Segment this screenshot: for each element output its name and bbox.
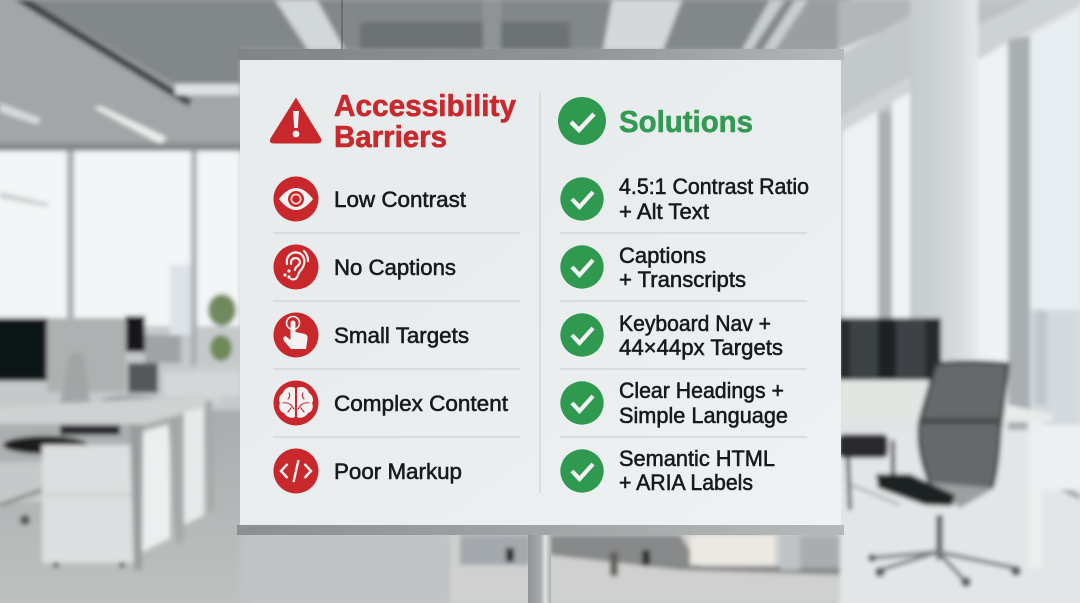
left floor: [0, 410, 250, 603]
item: no captions: [274, 244, 456, 290]
icon: code brackets: [274, 448, 318, 494]
icon: check: [560, 449, 604, 493]
ceiling: [0, 0, 850, 150]
icon: large check: [558, 97, 606, 145]
left windows: [0, 151, 240, 326]
label: keyboard nav and targets: Keyboard Nav +: [619, 311, 771, 336]
right floor: [838, 430, 1080, 603]
panel: solutions column: [558, 97, 809, 495]
right wall and windows: [838, 0, 1080, 603]
heading: accessibility barriers: Accessibility: [334, 88, 517, 123]
item: captions: [560, 243, 746, 292]
icon: check: [560, 245, 604, 289]
label: low contrast: Low Contrast: [334, 187, 466, 212]
heading: solutions: Solutions: [619, 104, 753, 139]
office chair: [919, 362, 1008, 494]
label: semantic html and aria labels: Semantic HTML: [619, 446, 775, 471]
item: poor markup: [274, 448, 462, 494]
plant: [208, 294, 236, 326]
item: low contrast: [274, 176, 466, 222]
right black monitors: [838, 318, 941, 380]
far chair: [838, 434, 888, 458]
icon: eye: [274, 176, 318, 222]
label: no captions: No Captions: [334, 255, 456, 280]
icon: ear: [274, 244, 318, 290]
heading: accessibility barriers: Barriers: [334, 119, 447, 154]
panel: barriers column: [270, 88, 517, 494]
icon: check: [560, 313, 604, 357]
bottom rail: [237, 525, 844, 535]
item: keyboard nav: [560, 311, 783, 360]
cabinet: [42, 445, 136, 563]
icon: brain: [274, 380, 318, 426]
label: clear headings and simple language: Simple Language: [619, 403, 788, 428]
panel: board: [240, 60, 841, 525]
label: captions and transcripts: + Transcripts: [619, 267, 746, 292]
item: complex content: [274, 380, 508, 426]
label: captions and transcripts: Captions: [619, 243, 706, 268]
item: contrast ratio: [560, 174, 809, 224]
icon: check: [560, 381, 604, 425]
right desk: [838, 380, 928, 423]
icon: check: [560, 177, 604, 221]
hanging wire: [341, 0, 343, 49]
label: contrast ratio and alt text: 4.5:1 Contrast Ratio: [619, 174, 809, 199]
label: semantic html and aria labels: + ARIA Labels: [619, 470, 753, 495]
top rail: [237, 49, 844, 60]
icon: pointing hand: [274, 312, 318, 358]
label: poor markup: Poor Markup: [334, 459, 462, 484]
label: clear headings and simple language: Clear Headings +: [619, 378, 784, 403]
label: keyboard nav and targets: 44×44px Targets: [619, 335, 783, 360]
item: clear headings: [560, 378, 788, 428]
bottom centre floor: [240, 535, 450, 603]
label: contrast ratio and alt text: + Alt Text: [619, 199, 709, 224]
left desk equipment: [0, 318, 49, 381]
label: small targets: Small Targets: [334, 323, 469, 348]
item: semantic html: [560, 446, 775, 495]
item: small targets: [274, 312, 469, 358]
icon: warning triangle: [270, 98, 321, 143]
stand pole: [528, 535, 551, 603]
label: complex content: Complex Content: [334, 391, 508, 416]
